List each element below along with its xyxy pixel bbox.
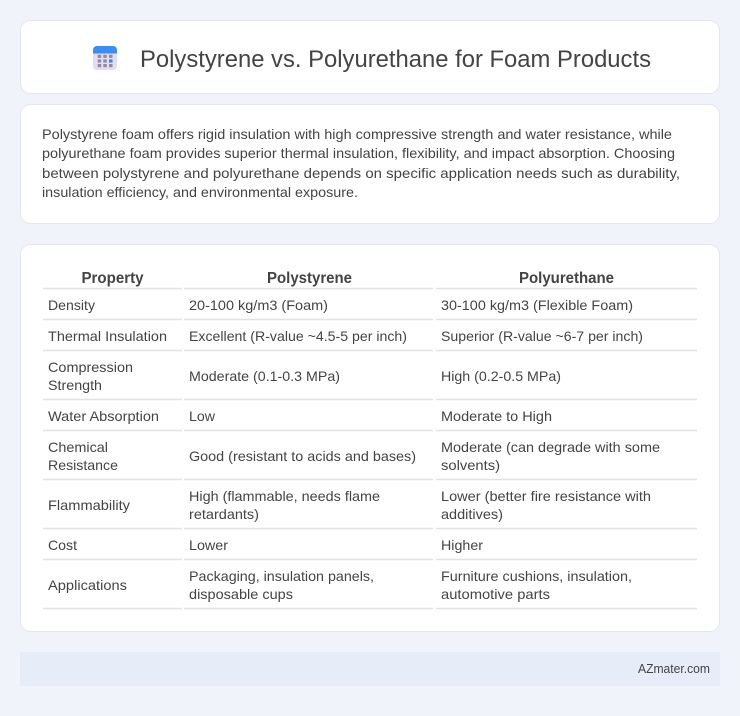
row: compression strength: High (0.2-0.5 MPa) (441, 368, 561, 384)
row: compression strength: Moderate (0.1-0.3 MPa) (189, 368, 340, 384)
row: applications: automotive parts (441, 586, 550, 602)
row: water absorption: Low (189, 408, 216, 424)
row: applications: Furniture cushions, insulation, (441, 568, 632, 584)
row: chemical resistance: Moderate (can degrade with some (441, 439, 660, 455)
row: chemical resistance: Chemical (48, 439, 108, 455)
row: applications: disposable cups (189, 586, 293, 602)
row: applications (48, 568, 632, 602)
row: flammability (48, 488, 651, 522)
footer (20, 652, 720, 686)
row: thermal insulation: Superior (R-value ~6-7 per inch) (441, 328, 643, 344)
summary text: Polystyrene foam offers rigid insulation with high compressive strength and water resistance, while (42, 126, 672, 142)
row: flammability: retardants) (189, 506, 259, 522)
row: thermal insulation: Thermal Insulation (48, 328, 167, 344)
row: water absorption: Water Absorption (48, 408, 159, 424)
row: cost: Higher (441, 537, 483, 553)
panel: comparison table (20, 244, 720, 632)
row: flammability: Flammability (48, 497, 130, 513)
row: flammability: additives) (441, 506, 503, 522)
row: chemical resistance: solvents) (441, 457, 500, 473)
row: cost (48, 537, 483, 553)
row: flammability: High (flammable, needs flame (189, 488, 380, 504)
summary text: between polystyrene and polyurethane depends on specific application needs such as durability, (42, 165, 680, 181)
summary text: insulation efficiency, and environmental exposure. (42, 184, 358, 200)
row: water absorption (48, 408, 552, 424)
row: thermal insulation: Excellent (R-value ~4.5-5 per inch) (189, 328, 407, 344)
row: chemical resistance (48, 439, 660, 473)
row: compression strength (48, 359, 561, 393)
table header: Polystyrene (267, 270, 352, 287)
panel: title (20, 20, 720, 94)
row: density: 20-100 kg/m3 (Foam) (189, 297, 328, 313)
row: chemical resistance: Good (resistant to acids and bases) (189, 448, 416, 464)
table header (82, 270, 614, 287)
row: water absorption: Moderate to High (441, 408, 552, 424)
icon: calendar (93, 46, 117, 70)
row: density (48, 297, 633, 313)
title text: Polystyrene vs. Polyurethane for Foam Products (140, 46, 651, 73)
row: applications: Applications (48, 577, 127, 593)
row: density: Density (48, 297, 95, 313)
row: flammability: Lower (better fire resistance with (441, 488, 651, 504)
panel: summary (20, 104, 720, 224)
summary text (42, 126, 680, 200)
row: density: 30-100 kg/m3 (Flexible Foam) (441, 297, 633, 313)
row: cost: Lower (189, 537, 228, 553)
table header: Polyurethane (519, 270, 614, 287)
row: chemical resistance: Resistance (48, 457, 118, 473)
row: thermal insulation (48, 328, 643, 344)
row: applications: Packaging, insulation panels, (189, 568, 374, 584)
row: compression strength: Strength (48, 377, 102, 393)
row: cost: Cost (48, 537, 77, 553)
footer credit: AZmater.com (638, 662, 710, 676)
table header: Property (82, 270, 144, 287)
summary text: polyurethane foam provides superior thermal insulation, flexibility, and impact absorption. Choosing (42, 145, 675, 161)
row: compression strength: Compression (48, 359, 133, 375)
